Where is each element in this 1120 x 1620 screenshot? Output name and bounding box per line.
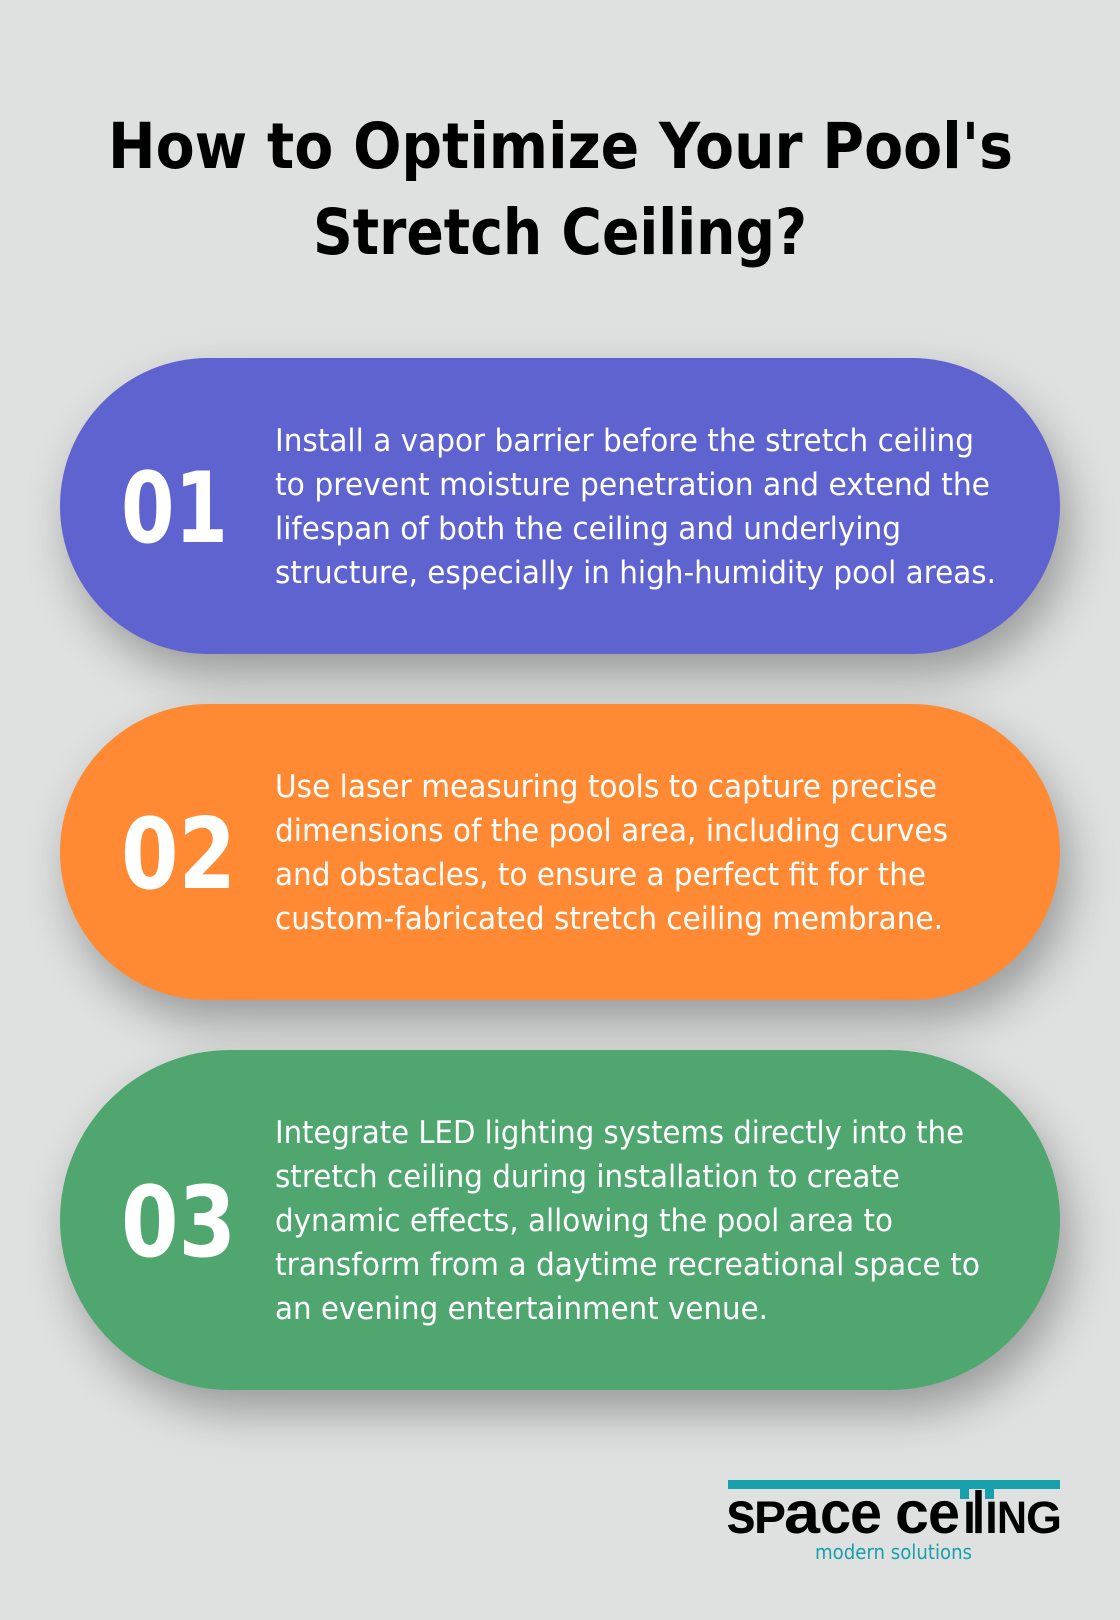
logo: space ceiling (726, 1480, 1062, 1564)
logo wordmark: i (963, 1480, 976, 1546)
logo wordmark: i (985, 1480, 998, 1546)
step 02 text: dimensions of the pool area, including curves (275, 813, 948, 849)
step 02 text (275, 769, 948, 937)
logo tagline: modern solutions (815, 1540, 972, 1564)
step 01 text: lifespan of both the ceiling and underlying (275, 511, 901, 547)
logo wordmark (728, 1490, 1060, 1534)
title: Stretch Ceiling? (313, 196, 807, 269)
title: How to Optimize Your Pool's (108, 110, 1013, 183)
step 01 text: structure, especially in high-humidity pool areas. (275, 555, 996, 591)
number 01: 01 (121, 452, 228, 566)
title (108, 110, 1013, 269)
logo wordmark: a (784, 1480, 821, 1546)
panel: step 02 laser measuring (60, 704, 1060, 1000)
step 03 text: an evening entertainment venue. (275, 1291, 768, 1327)
step 03 text: Integrate LED lighting systems directly into the (275, 1115, 964, 1151)
number 02: 02 (121, 798, 236, 912)
logo wordmark: c (820, 1480, 851, 1546)
logo wordmark: e (928, 1480, 960, 1546)
panel: step 01 vapor barrier (60, 358, 1060, 654)
step 02 text: custom-fabricated stretch ceiling membrane. (275, 901, 943, 937)
step 03 text: stretch ceiling during installation to create (275, 1159, 900, 1195)
panel: step 03 LED lighting (60, 1050, 1060, 1390)
step 03 text (275, 1115, 980, 1327)
logo wordmark: l (972, 1480, 985, 1546)
step 03 text: transform from a daytime recreational space to (275, 1247, 980, 1283)
logo wordmark: e (850, 1480, 882, 1546)
step 02 text: and obstacles, to ensure a perfect fit for the (275, 857, 926, 893)
logo wordmark: G (1026, 1492, 1062, 1543)
logo bar (728, 1480, 1060, 1499)
step 01 text (275, 423, 996, 591)
step 01 text: to prevent moisture penetration and extend the (275, 467, 990, 503)
logo wordmark: N (997, 1492, 1027, 1543)
step 03 text: dynamic effects, allowing the pool area to (275, 1203, 893, 1239)
number 03: 03 (121, 1166, 236, 1280)
step 01 text: Install a vapor barrier before the stretch ceiling (275, 423, 974, 459)
step 02 text: Use laser measuring tools to capture precise (275, 769, 937, 805)
logo wordmark: c (895, 1480, 929, 1546)
logo wordmark: s (726, 1480, 756, 1546)
logo wordmark: P (754, 1492, 786, 1543)
